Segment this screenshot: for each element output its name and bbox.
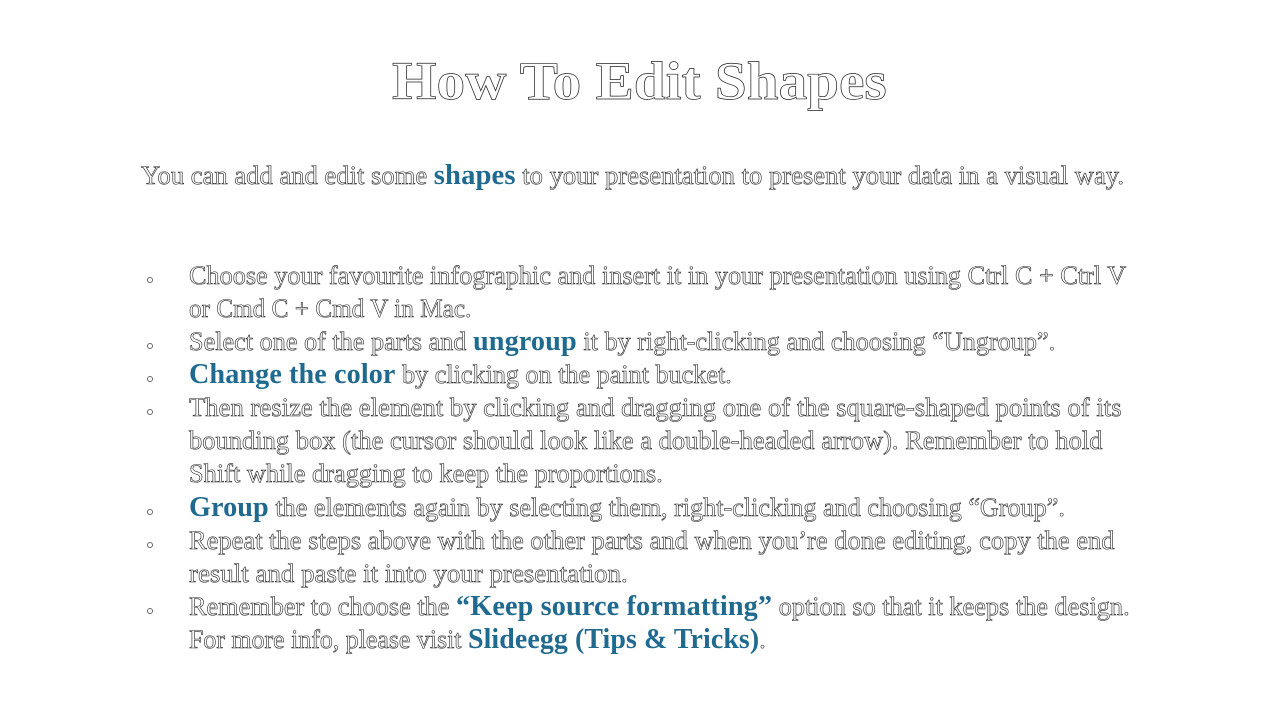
step 7: For more info, please visit Slideegg (Tips & Tricks). [189,624,766,655]
step 5: Group the elements again by selecting them, right-clicking and choosing “Group”. [189,492,1065,523]
instruction list [147,261,1130,655]
intro text: You can add and edit some shapes to your presentation to present your data in a visual way. [141,160,1124,191]
step 1: or Cmd C + Cmd V in Mac. [189,294,471,323]
step 6: Repeat the steps above with the other parts and when you’re done editing, copy the end [189,526,1115,555]
step 1: Choose your favourite infographic and insert it in your presentation using Ctrl C + Ctrl V [189,261,1126,290]
step 3: Change the color by clicking on the paint bucket. [189,359,732,390]
step 4: Shift while dragging to keep the proportions. [189,459,663,488]
step 2: Select one of the parts and ungroup it by right-clicking and choosing “Ungroup”. [189,326,1055,357]
title: How To Edit Shapes [392,51,887,111]
step 1 [147,261,1126,323]
step 6 [147,526,1115,588]
step 4 [147,393,1122,488]
step 7 [147,591,1130,655]
step 4: Then resize the element by clicking and dragging one of the square-shaped points of its [189,393,1122,422]
step 7: Remember to choose the “Keep source formatting” option so that it keeps the design. [189,591,1130,622]
step 4: bounding box (the cursor should look like a double-headed arrow). Remember to hold [189,426,1102,455]
step 6: result and paste it into your presentation. [189,559,628,588]
